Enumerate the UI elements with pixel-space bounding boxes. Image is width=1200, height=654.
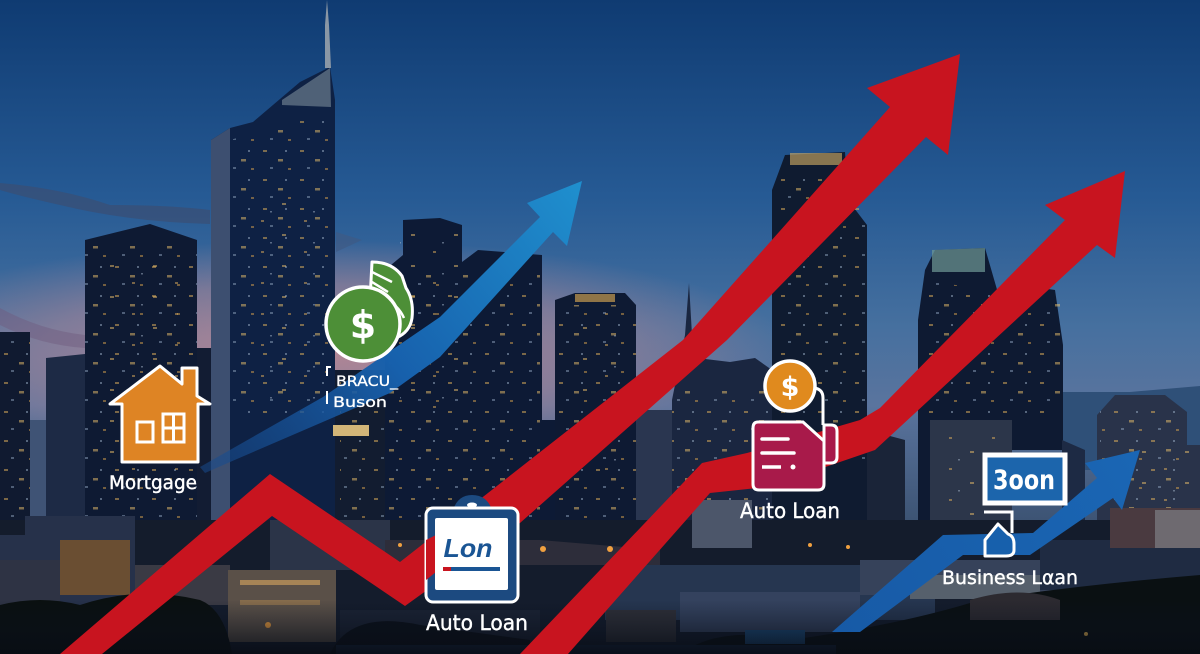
blue arrow: left rising <box>200 181 582 473</box>
lower city foreground <box>0 500 1200 654</box>
label: garbled money text: Buson <box>333 395 387 411</box>
icon: green money bag <box>326 262 412 361</box>
icon: business loan screen and hand <box>984 455 1065 556</box>
building window lights <box>0 110 1200 530</box>
icon: green money bag: $ <box>350 303 376 347</box>
icon: mortgage house <box>110 366 210 462</box>
red arrow: right rising <box>520 171 1125 654</box>
icon: loan clipboard: Lon <box>444 533 492 563</box>
red arrow: main zigzag rising <box>60 54 960 654</box>
icon: business loan screen and hand: 3oon <box>993 465 1055 496</box>
label: auto loan left: Auto Loan <box>426 611 528 635</box>
icon: coin and document: $ <box>781 372 799 403</box>
label: business loan: Business Lαan <box>942 568 1078 589</box>
blue arrow: bottom right rising <box>832 450 1140 632</box>
icon: loan clipboard <box>426 495 518 602</box>
label: auto loan right: Auto Loan <box>740 499 840 523</box>
icon: coin and document <box>753 361 837 490</box>
label: garbled money text: BRACU_ <box>336 374 399 390</box>
label: mortgage: Mortgage <box>109 472 197 494</box>
label: garbled money text <box>327 367 399 411</box>
